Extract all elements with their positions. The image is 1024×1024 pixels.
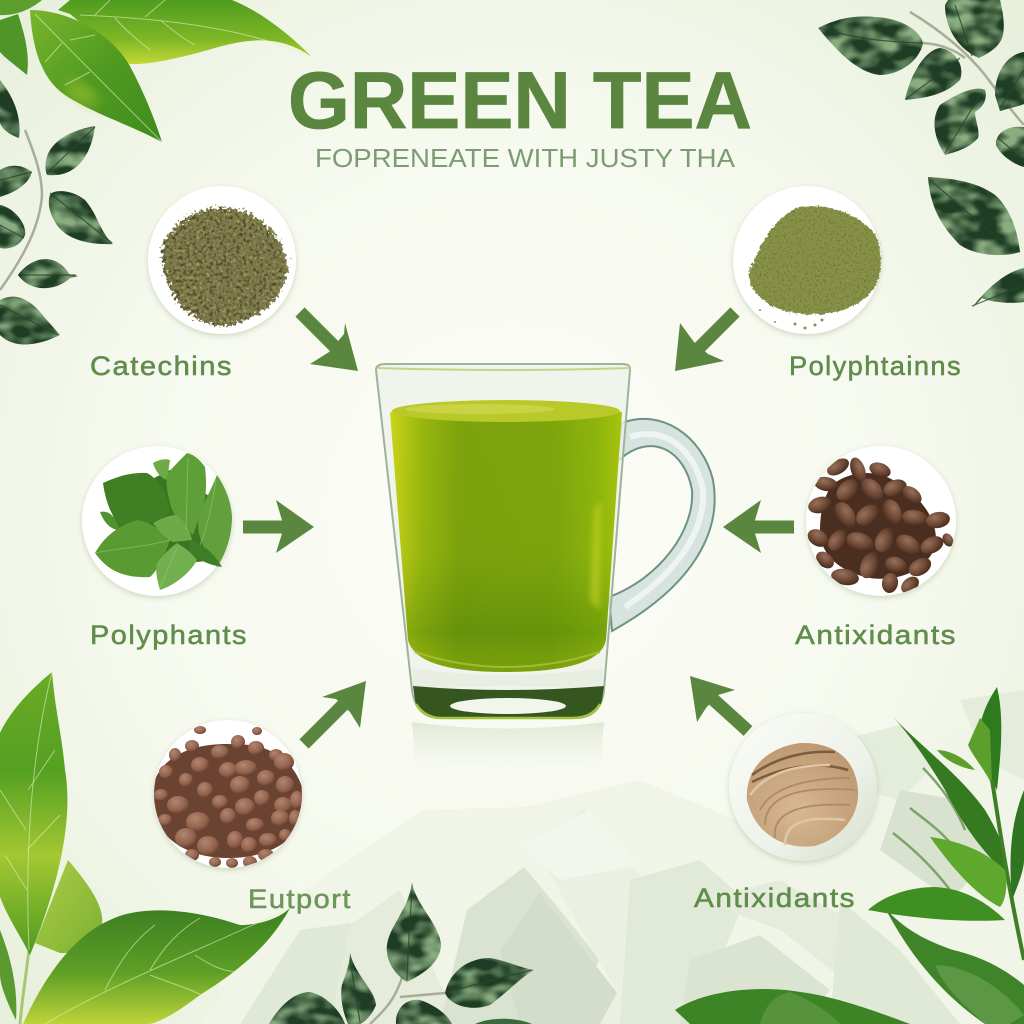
handle highlight — [625, 434, 703, 607]
label: catechins: Catechins — [90, 351, 233, 381]
leaf: diagonal yellow patch — [63, 77, 101, 111]
tea bottom rim — [415, 652, 600, 667]
tea surface highlight — [405, 404, 555, 414]
top-right dark leaves — [818, 0, 1024, 308]
center leaves — [269, 883, 534, 1024]
swirl circle — [729, 713, 877, 861]
beans circle — [806, 446, 956, 596]
catechins tea flakes — [162, 208, 287, 326]
glass base — [413, 686, 604, 718]
leaf: yellow back — [35, 860, 102, 953]
big lower leaf — [885, 908, 1024, 1024]
matcha powder pile — [749, 206, 881, 314]
bottom-center dark leaves — [269, 883, 534, 1024]
thin pale blades — [893, 768, 965, 890]
arrow: bottom-left — [304, 681, 366, 744]
tea right highlight — [590, 500, 601, 610]
leaf: wide bottom — [23, 908, 290, 1024]
rim highlight — [378, 368, 630, 370]
label: antixidants right: Antixidants — [795, 620, 957, 650]
polyphtainns circle — [733, 186, 881, 334]
right edge leaf — [1010, 790, 1024, 900]
dome highlight — [760, 992, 840, 1024]
tea shading — [390, 407, 622, 672]
eutport circle — [154, 720, 302, 868]
tan swirl ball — [747, 743, 858, 847]
leaf: tall — [0, 672, 67, 955]
leaf: wide bottom veins — [45, 908, 290, 1024]
label: polyphants: Polyphants — [90, 620, 248, 650]
leaf stem — [20, 950, 29, 1024]
leaf: top wide — [58, 0, 312, 64]
bottom-right green leaves — [675, 687, 1024, 1024]
leaf: diagonal midrib — [35, 14, 162, 142]
tip light leaf — [968, 718, 992, 785]
panel: polyphants — [82, 446, 232, 596]
panel: polyphtainns — [733, 186, 881, 334]
panel: antixidants swirl — [729, 713, 877, 861]
arrow: top-left — [300, 312, 358, 371]
branch — [910, 12, 1024, 125]
tall blade — [893, 717, 1008, 875]
leaf: diagonal — [30, 10, 162, 142]
glass mug of green tea — [376, 364, 715, 772]
leaf: tall veins — [0, 672, 60, 950]
catechins circle — [148, 186, 296, 334]
panel: antixidants beans — [804, 446, 956, 597]
leaf: small left — [0, 930, 16, 1020]
horizontal leaf — [868, 887, 1005, 921]
panel: eutport beans — [152, 720, 305, 868]
panel: catechins — [148, 186, 296, 334]
leaf: left edge — [0, 14, 28, 75]
sprig leaves — [0, 80, 113, 344]
polyphants circle — [82, 446, 232, 596]
sprig stem — [0, 130, 42, 290]
powder specks — [759, 309, 824, 330]
label: polyphtainns: Polyphtainns — [789, 351, 962, 381]
tea surface — [392, 400, 620, 422]
label: eutport: Eutport — [248, 884, 352, 914]
base lens — [450, 698, 566, 714]
fresh leaves — [95, 453, 232, 590]
mug reflection — [412, 722, 604, 772]
base clear band — [412, 668, 603, 690]
mug handle — [609, 419, 715, 631]
main stem — [992, 780, 1024, 960]
center stems — [370, 975, 445, 1024]
label: antixidants bottom: Antixidants — [694, 883, 856, 913]
subtitle: FOPRENEATE WITH JUSTY THA — [315, 143, 736, 173]
coffee beans — [804, 455, 956, 597]
top-left dark sprig — [0, 80, 113, 344]
leaf: corner — [0, 0, 42, 15]
branch leaves — [818, 0, 1024, 308]
round brown beans — [152, 726, 305, 868]
tea liquid — [390, 407, 622, 672]
arrow: middle-right — [723, 500, 794, 553]
big lower leaf pale patches — [935, 965, 1024, 1024]
low-poly mountain backdrop — [200, 690, 1024, 1024]
glass body — [376, 364, 630, 718]
arrow: bottom-right — [690, 676, 748, 731]
base lime edge — [416, 704, 600, 718]
top-left light leaves — [0, 0, 312, 142]
tip dark leaf — [979, 687, 1001, 790]
arrow: top-right — [675, 312, 735, 371]
bottom-left light leaves — [0, 672, 290, 1024]
side small leaf — [937, 750, 975, 770]
bright leaf — [930, 837, 1006, 907]
title: GREEN TEA — [288, 56, 752, 146]
leaf: top wide veins — [80, 0, 312, 57]
dome leaf — [675, 989, 910, 1024]
arrow: middle-left — [243, 500, 314, 553]
